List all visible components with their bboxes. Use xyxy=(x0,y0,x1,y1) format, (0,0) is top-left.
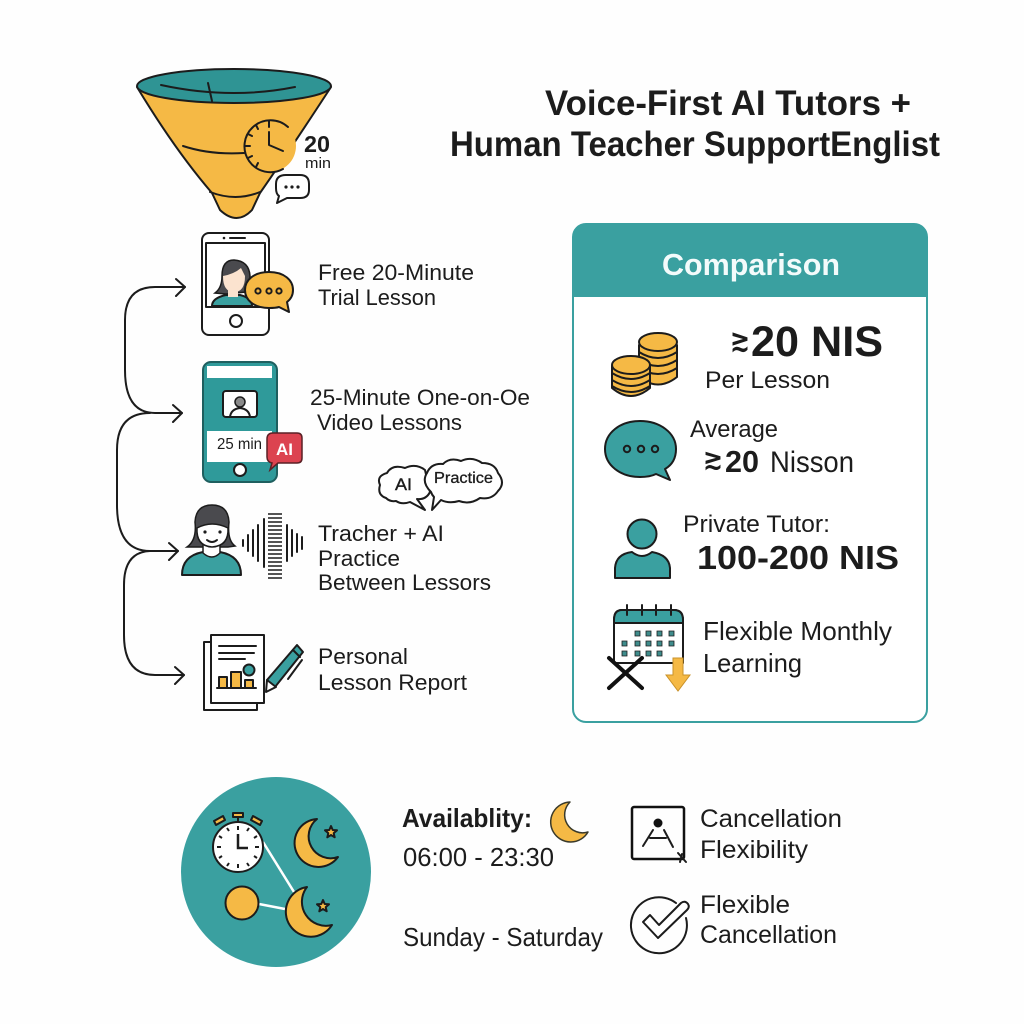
icon: AI badge: AI xyxy=(276,440,293,459)
clock duration label xyxy=(304,131,331,172)
icon: calendar with cross and arrow xyxy=(609,605,690,691)
title: Human Teacher SupportEnglist xyxy=(450,125,940,164)
clock duration label: min xyxy=(305,155,331,172)
comparison value: private tutor: Private Tutor: xyxy=(683,511,830,538)
icon: video lesson phone xyxy=(203,362,302,482)
icon: phone with tutor xyxy=(202,233,293,335)
icon: availability circle xyxy=(181,777,371,967)
icon: lower moon and star xyxy=(286,887,332,937)
label: cancellation flexibility xyxy=(700,805,842,864)
icon: lesson report and pen xyxy=(204,635,303,710)
panel header: Comparison xyxy=(662,247,840,282)
icon: AI practice clouds: Practice xyxy=(434,470,493,487)
availability text: 06:00 - 23:30 xyxy=(403,842,554,872)
comparison value: per lesson: Per Lesson xyxy=(705,367,830,394)
label: flexible cancellation xyxy=(700,891,837,949)
label: video lessons xyxy=(310,385,530,435)
label: video lessons: 25-Minute One-on-Oe xyxy=(310,385,530,410)
label: video lessons: Video Lessons xyxy=(317,410,462,435)
arrows: flow connectors xyxy=(117,279,185,684)
icon: check circle xyxy=(631,897,689,953)
icon: private tutor person xyxy=(615,520,670,578)
comparison value: flexible learning: Learning xyxy=(703,648,802,678)
label: teacher plus AI practice: Tracher + AI xyxy=(318,521,444,546)
comparison value: average: Average xyxy=(690,416,778,443)
icon: AI practice clouds xyxy=(379,459,502,510)
icon: yellow speech bubble xyxy=(245,272,293,312)
title xyxy=(450,84,940,164)
label: lesson report: Lesson Report xyxy=(318,670,467,695)
comparison value: flexible learning xyxy=(703,616,892,678)
comparison value: average: ≳ xyxy=(703,443,723,474)
icon: small chat bubble xyxy=(276,175,309,203)
comparison value: per lesson: ≳ xyxy=(730,324,750,357)
comparison value: average xyxy=(690,416,854,479)
label: flexible cancellation: Cancellation xyxy=(700,921,837,949)
label: cancellation flexibility: Flexibility xyxy=(700,836,809,864)
icon: coin stacks xyxy=(612,333,677,396)
label: lesson report xyxy=(318,644,467,695)
availability text xyxy=(402,803,603,952)
panel header xyxy=(573,224,927,297)
comparison value: per lesson: 20 NIS xyxy=(751,318,883,366)
comparison value: private tutor xyxy=(683,511,899,576)
label: teacher plus AI practice xyxy=(318,521,491,595)
label: free trial: Trial Lesson xyxy=(318,285,436,310)
availability text: Availablity: xyxy=(402,803,532,833)
icon: cancellation box xyxy=(632,807,686,862)
label: lesson report: Personal xyxy=(318,644,408,669)
label: teacher plus AI practice: Between Lessors xyxy=(318,570,491,595)
comparison value: flexible learning: Flexible Monthly xyxy=(703,616,892,646)
icon: video lesson phone: 25 min xyxy=(217,436,262,453)
label: free trial: Free 20-Minute xyxy=(318,260,474,285)
icon: funnel with clock xyxy=(137,69,331,218)
icon: teacher with sound wave xyxy=(182,505,302,578)
icon: teal speech bubble xyxy=(605,421,676,480)
icon: availability moon xyxy=(551,802,588,842)
label: flexible cancellation: Flexible xyxy=(700,891,790,919)
comparison value: per lesson xyxy=(705,318,883,394)
clock duration label: 20 xyxy=(304,131,330,157)
panel: comparison xyxy=(573,224,927,722)
title: Voice-First AI Tutors + xyxy=(545,84,911,123)
icon: sun dot xyxy=(226,886,258,920)
label: free trial xyxy=(318,260,474,310)
icon: upper moon and star xyxy=(295,819,338,867)
label: cancellation flexibility: Cancellation xyxy=(700,805,842,833)
icon: AI practice clouds: AI xyxy=(395,475,412,494)
comparison value: private tutor: 100-200 NIS xyxy=(697,539,899,576)
comparison value: average: Nisson xyxy=(770,446,854,479)
label: teacher plus AI practice: Practice xyxy=(318,546,400,571)
icon: alarm clock xyxy=(213,813,263,872)
comparison value: average: 20 xyxy=(725,444,759,479)
availability text: Sunday - Saturday xyxy=(403,922,603,952)
